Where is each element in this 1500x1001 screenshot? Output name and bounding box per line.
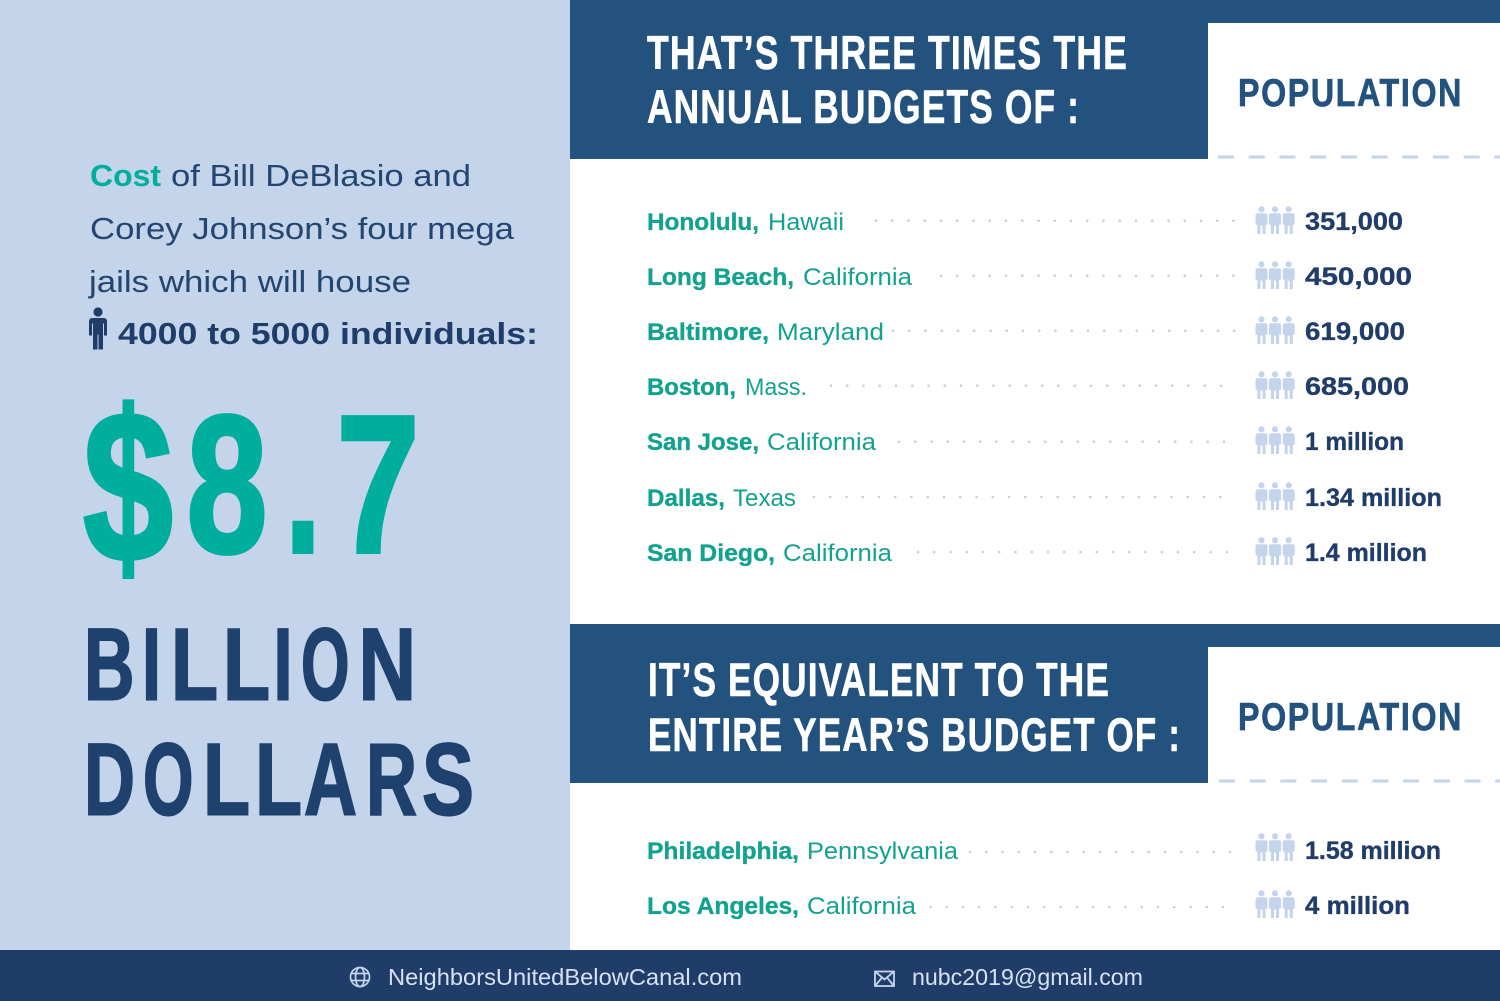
intro text: jails which will house: [88, 264, 411, 299]
row: Honolulu: 351,000: [1305, 208, 1403, 236]
row: San Jose: [647, 426, 1404, 456]
row: Honolulu: Hawaii: [768, 209, 844, 236]
big label: billion dollars: I: [274, 608, 292, 722]
row: Baltimore: Baltimore,: [647, 319, 769, 346]
row: Honolulu: [647, 206, 1403, 236]
row: Boston: [647, 371, 1409, 401]
row: Baltimore: 619,000: [1305, 318, 1405, 346]
row: Dallas: Texas: [733, 485, 796, 512]
row: San Diego: 1.4 million: [1305, 539, 1427, 567]
big label: billion dollars: S: [422, 722, 474, 836]
big label: billion dollars: L: [223, 608, 270, 722]
row: Los Angeles: [647, 890, 1410, 920]
footer email: nubc2019@gmail.com: [912, 964, 1143, 990]
row: Philadelphia: 1.58 million: [1305, 837, 1441, 865]
icon: person: [89, 307, 107, 350]
big number: 7: [336, 375, 420, 594]
big label: billion dollars: L: [203, 722, 250, 836]
header band 1: [570, 0, 1500, 159]
big label: billion dollars: O: [301, 608, 350, 722]
row: San Diego: [647, 537, 1427, 567]
row: Long Beach: California: [803, 264, 912, 291]
row: Los Angeles: 4 million: [1305, 892, 1410, 920]
header band 1: THAT’S THREE TIMES THE: [647, 27, 1128, 80]
intro text: [88, 158, 538, 351]
big label: billion dollars: B: [84, 608, 134, 722]
header band 2: ENTIRE YEAR’S BUDGET OF :: [648, 709, 1181, 762]
big label: billion dollars: [84, 608, 474, 836]
intro text: Corey Johnson’s four mega: [90, 211, 515, 246]
row: Los Angeles: California: [807, 893, 916, 920]
row: San Jose: California: [767, 429, 876, 456]
row: Baltimore: Maryland: [777, 319, 884, 346]
big number: [83, 366, 420, 607]
table 2: city budgets: [647, 833, 1441, 920]
big number: $: [83, 366, 173, 607]
row: Boston: Boston,: [647, 374, 736, 401]
row: Honolulu: Honolulu,: [647, 209, 759, 236]
row: Los Angeles: Los Angeles,: [647, 893, 799, 920]
intro text: of Bill DeBlasio and: [171, 158, 471, 193]
footer website: NeighborsUnitedBelowCanal.com: [388, 964, 742, 990]
row: Boston: 685,000: [1305, 373, 1409, 401]
header band 1: ANNUAL BUDGETS OF :: [647, 81, 1080, 134]
big label: billion dollars: R: [366, 722, 417, 836]
row: San Diego: San Diego,: [647, 540, 775, 567]
row: Boston: Mass.: [745, 374, 807, 401]
icon: envelope: [875, 972, 894, 986]
row: Dallas: 1.34 million: [1305, 484, 1442, 512]
intro text: Cost: [90, 158, 161, 193]
big label: billion dollars: L: [171, 608, 218, 722]
table 1: city budgets: [647, 206, 1442, 567]
big label: billion dollars: D: [84, 722, 135, 836]
row: Dallas: [647, 482, 1442, 512]
row: Dallas: Dallas,: [647, 485, 725, 512]
panel: left background: [0, 0, 570, 950]
row: Baltimore: [647, 316, 1405, 346]
big number: .: [285, 375, 321, 594]
row: San Jose: 1 million: [1305, 428, 1404, 456]
row: Philadelphia: Pennsylvania: [807, 838, 958, 865]
big label: billion dollars: N: [358, 608, 416, 722]
row: Long Beach: Long Beach,: [647, 264, 794, 291]
header band 2: IT’S EQUIVALENT TO THE: [648, 654, 1110, 707]
icon: globe: [350, 968, 370, 986]
row: San Diego: California: [783, 540, 892, 567]
footer: [0, 950, 1500, 1001]
big label: billion dollars: A: [304, 722, 357, 836]
intro text: 4000 to 5000 individuals:: [118, 316, 538, 351]
big label: billion dollars: I: [142, 608, 161, 722]
big label: billion dollars: L: [255, 722, 302, 836]
header band 2: [570, 624, 1500, 783]
row: San Jose: San Jose,: [647, 429, 759, 456]
big number: 8: [186, 375, 268, 594]
row: Long Beach: 450,000: [1305, 263, 1412, 291]
row: Philadelphia: [647, 833, 1441, 865]
row: Philadelphia: Philadelphia,: [647, 838, 799, 865]
row: Long Beach: [647, 261, 1412, 291]
big label: billion dollars: O: [143, 722, 194, 836]
